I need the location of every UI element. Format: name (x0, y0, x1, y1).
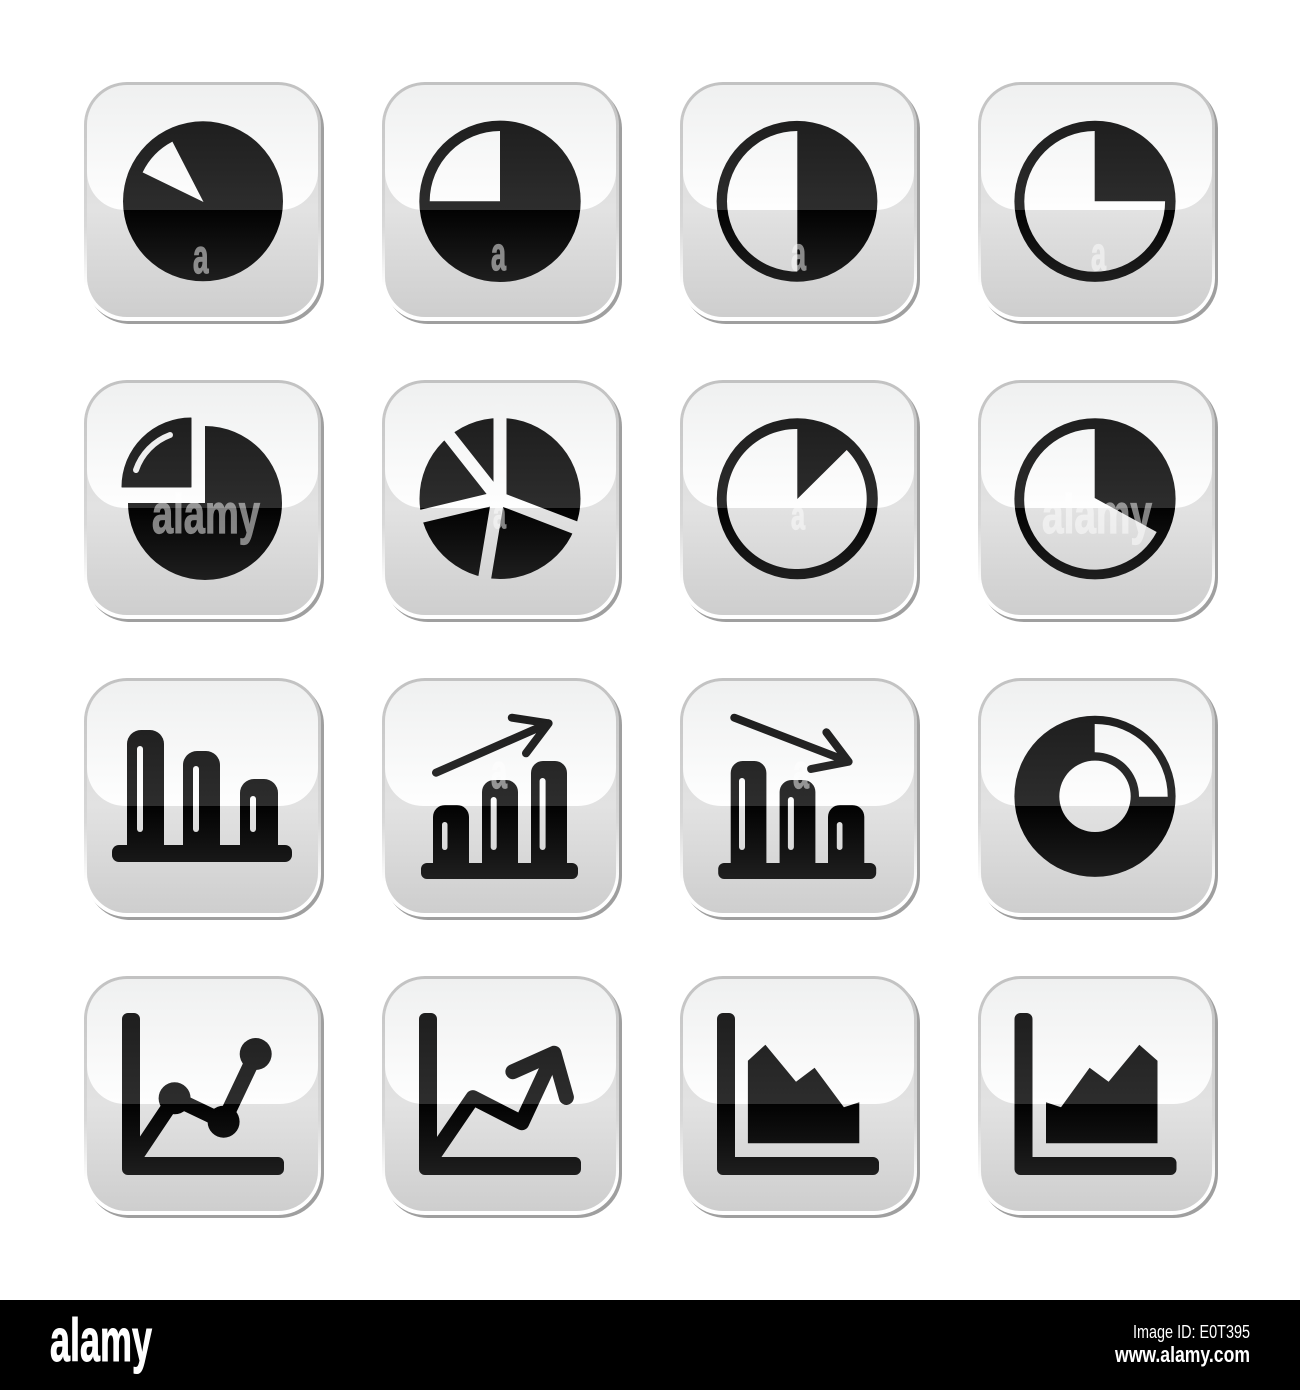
icon: pie quarter white (419, 121, 581, 282)
button: exploded pie chart (84, 380, 324, 622)
watermark letter: a (493, 493, 506, 537)
button: pie chart with five segments (382, 380, 622, 622)
icon: three bars on a base (112, 730, 292, 862)
image id: Image ID: E0T395 (1133, 1322, 1250, 1342)
button: line chart with points (84, 976, 324, 1218)
icon: pie wedge (717, 418, 878, 579)
watermark wordmark: alamy (152, 482, 260, 545)
icon: axes with rising area (1014, 1013, 1176, 1175)
icon: pie quarter dark (1014, 121, 1176, 282)
button: descending bar chart (84, 678, 324, 920)
watermark letter: a (791, 227, 806, 280)
icon: pie third (1014, 418, 1176, 579)
icon: pie small slice (123, 121, 283, 281)
button: pie chart with quarter cut out (382, 82, 622, 324)
button: area chart descending (680, 976, 920, 1218)
button: pie chart with small slice (84, 82, 324, 324)
watermark letter: a (791, 494, 805, 538)
website: www.alamy.com (1114, 1342, 1250, 1367)
button: pie chart with third dark (978, 380, 1218, 622)
icon: axes with falling area (717, 1013, 879, 1175)
button: pie chart three quarters white (978, 82, 1218, 324)
button: falling bar chart with arrow (680, 678, 920, 920)
watermark letter: a (193, 231, 209, 284)
icon: bars with down arrow (718, 718, 876, 879)
footer logo: alamy (50, 1307, 152, 1374)
button: half pie chart (680, 82, 920, 324)
icon: bars with up arrow (421, 718, 578, 879)
watermark letter: a (491, 227, 506, 280)
watermark letter: a (1091, 227, 1106, 280)
watermark letter: a (491, 746, 507, 799)
watermark letter: a (793, 746, 809, 799)
button: donut chart (978, 678, 1218, 920)
watermark wordmark: alamy (1042, 482, 1152, 545)
icon: axes with data points (122, 1013, 284, 1175)
icon: half pie (717, 121, 877, 282)
button: pie chart with wedge (680, 380, 920, 622)
footer bar (0, 1300, 1300, 1390)
icon: axes with trend arrow (419, 1013, 581, 1175)
button: rising bar chart with arrow (382, 678, 622, 920)
icon: donut with highlighted segment (1014, 716, 1176, 877)
icon: segmented pie (414, 410, 584, 588)
icon: exploded pie (122, 418, 282, 580)
button: area chart ascending (978, 976, 1218, 1218)
button: line chart with rising arrow (382, 976, 622, 1218)
